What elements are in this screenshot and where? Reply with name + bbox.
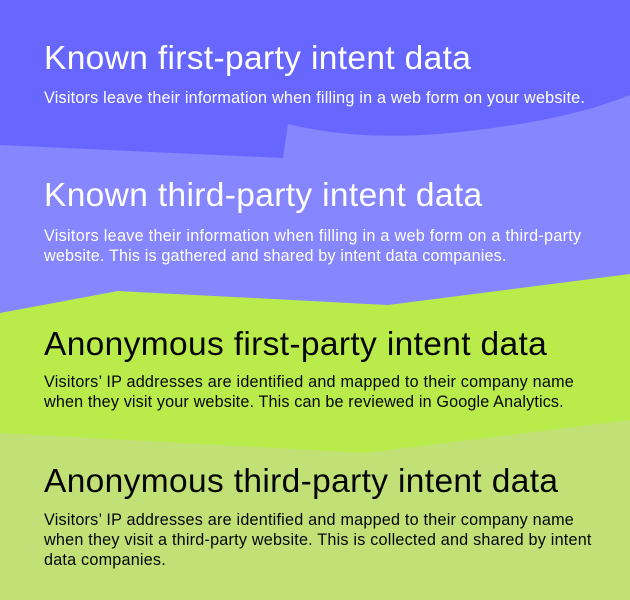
text: anonymous third-party description	[44, 511, 592, 569]
heading: known first-party: Known first-party intent data	[44, 40, 471, 77]
text: known first-party description: Visitors leave their information when filling in a web form on your website.	[44, 89, 585, 107]
text: anonymous first-party description	[44, 373, 574, 411]
panel: known first-party	[44, 40, 585, 107]
text: known third-party description: website. This is gathered and shared by intent data companies.	[44, 247, 507, 265]
heading: anonymous third-party: Anonymous third-party intent data	[44, 463, 558, 500]
text: anonymous third-party description: Visitors’ IP addresses are identified and mapped to their company name	[44, 511, 574, 529]
text: anonymous first-party description: Visitors’ IP addresses are identified and mapped to their company name	[44, 373, 574, 391]
panel: anonymous first-party	[44, 326, 574, 411]
text: anonymous third-party description: data companies.	[44, 551, 166, 569]
heading: known third-party: Known third-party intent data	[44, 177, 482, 214]
text: anonymous third-party description: when they visit a third-party website. This is collected and shared by intent	[44, 531, 592, 549]
text: known third-party description: Visitors leave their information when filling in a web form on a third-party	[44, 227, 581, 245]
heading: anonymous first-party: Anonymous first-party intent data	[44, 326, 547, 363]
panel: known third-party	[44, 177, 581, 265]
text: known third-party description	[44, 227, 581, 265]
panel: anonymous third-party	[44, 463, 592, 569]
text: anonymous first-party description: when they visit your website. This can be reviewed in Google Analytics.	[44, 393, 564, 411]
